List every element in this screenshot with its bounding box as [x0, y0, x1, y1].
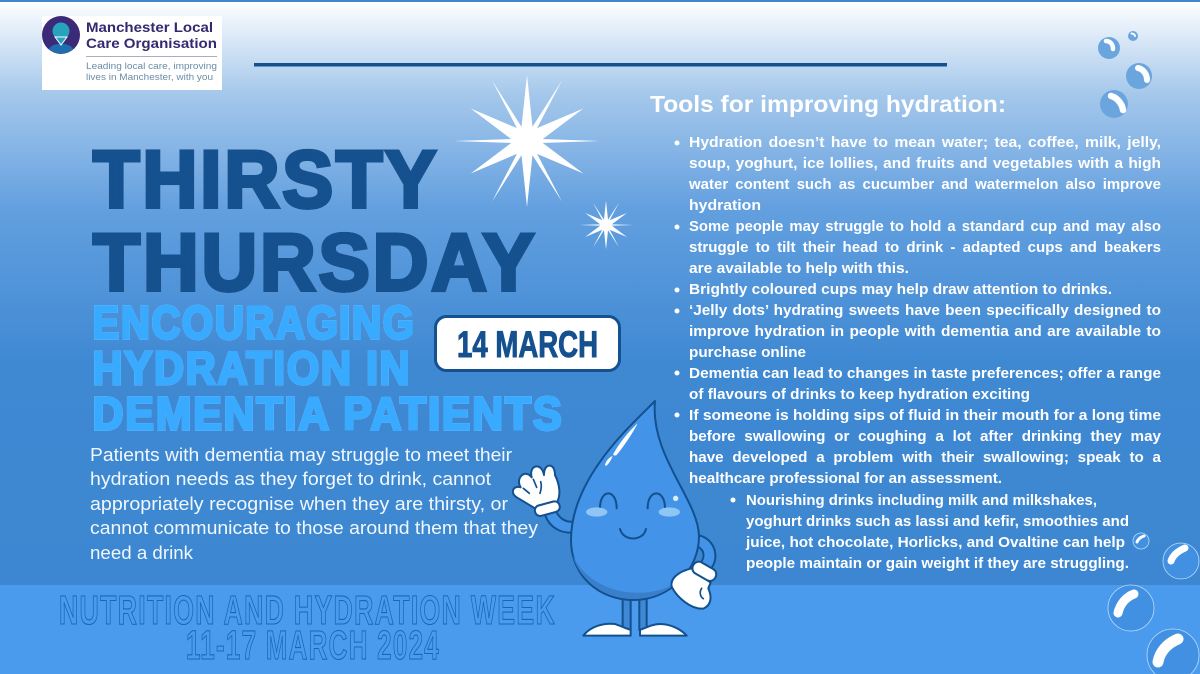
text block: hydration tools list: people maintain or gain weight if they are struggling.	[746, 555, 1129, 572]
text block: hydration tools list: hydration	[689, 197, 761, 214]
text block: intro paragraph: need a drink	[90, 543, 194, 563]
text block: hydration tools list: ‘Jelly dots’ hydrating sweets have been specifically designed to	[689, 302, 1161, 319]
text block: intro paragraph: cannot communicate to those around them that they	[90, 518, 538, 538]
text block: hydration tools list: Nourishing drinks including milk and milkshakes,	[746, 492, 1097, 509]
heading: Tools for improving hydration: Tools for improving hydration:	[650, 91, 1006, 117]
subtitle: Encouraging hydration in dementia patients: HYDRATION IN	[92, 342, 412, 394]
text block: hydration tools list: yoghurt drinks such as lassi and kefir, smoothies and	[746, 513, 1129, 530]
icon: water drop mascot	[513, 401, 718, 636]
shine	[605, 423, 638, 466]
text block: hydration tools list: If someone is holding sips of fluid in their mouth for a long time	[689, 407, 1161, 424]
divider line	[254, 63, 947, 66]
icon: bubbles top right	[1098, 31, 1152, 118]
text block: hydration tools list: healthcare professional for an assessment.	[689, 470, 1002, 487]
subtitle: Encouraging hydration in dementia patients: DEMENTIA PATIENTS	[92, 388, 564, 440]
subtitle: Encouraging hydration in dementia patients	[92, 296, 564, 440]
text block: intro paragraph: appropriately recognise when they are thirsty, or	[90, 494, 508, 514]
text block: hydration tools list: soup, yoghurt, ice lollies, and fruits and vegetables with a high	[689, 155, 1161, 172]
bottom banner text: Nutrition and Hydration Week	[59, 587, 556, 668]
text block: hydration tools list: are available to help with this.	[689, 260, 909, 277]
bottom banner text: Nutrition and Hydration Week: 11-17 MARCH 2024	[186, 622, 440, 668]
text block: hydration tools list: struggle to tilt their head to drink - adapted cups and beakers	[689, 239, 1161, 256]
text block: hydration tools list: before swallowing or coughing a lot after drinking they may	[689, 428, 1162, 445]
icon: small sparkle	[579, 201, 633, 249]
drop body	[571, 401, 699, 600]
logo: Manchester Local Care Organisation	[42, 16, 222, 90]
text block: intro paragraph	[90, 445, 538, 563]
text block: hydration tools list: have developed a problem with their swallowing; speak to a	[689, 449, 1162, 466]
logo: Manchester Local Care Organisation: Care Organisation	[86, 36, 217, 51]
right arm	[695, 535, 715, 570]
body shade	[573, 555, 677, 599]
bottom band	[0, 585, 1200, 674]
logo: Manchester Local Care Organisation: lives in Manchester, with you	[86, 72, 213, 83]
title: Thirsty Thursday: THIRSTY	[93, 135, 439, 225]
text block: hydration tools list: water content such as cucumber and watermelon also improve	[688, 176, 1161, 193]
shoes	[583, 624, 687, 636]
logo: Manchester Local Care Organisation: Manchester Local	[86, 20, 213, 35]
text block: hydration tools list: Some people may struggle to hold a standard cup and may also	[689, 218, 1161, 235]
text block: hydration tools list: Dementia can lead to changes in taste preferences; offer a range	[689, 365, 1161, 382]
left arm	[545, 512, 574, 533]
date badge: 14 March: 14 MARCH	[457, 324, 598, 365]
fist	[671, 568, 711, 609]
bottom banner text: Nutrition and Hydration Week: NUTRITION AND HYDRATION WEEK	[59, 587, 556, 633]
legs	[623, 597, 647, 630]
text block: hydration tools list: juice, hot chocolate, Horlicks, and Ovaltine can help	[745, 534, 1125, 551]
logo: Manchester Local Care Organisation: Leading local care, improving	[86, 61, 217, 72]
date badge: 14 March	[436, 316, 620, 370]
text block: hydration tools list: improve hydration in people with dementia and are available to	[689, 323, 1161, 340]
subtitle: Encouraging hydration in dementia patients: ENCOURAGING	[92, 296, 416, 348]
text block: hydration tools list: purchase online	[689, 344, 806, 361]
text block: intro paragraph: Patients with dementia may struggle to meet their	[90, 445, 512, 465]
text block: hydration tools list: of flavours of drinks to keep hydration exciting	[689, 386, 1030, 403]
eyes and mouth	[600, 493, 665, 538]
icon: bubbles bottom right	[1108, 533, 1199, 674]
waving hand	[513, 466, 559, 508]
text block: hydration tools list: Brightly coloured cups may help draw attention to drinks.	[689, 281, 1112, 298]
text block: hydration tools list	[674, 134, 1162, 572]
text block: hydration tools list: Hydration doesn’t have to mean water; tea, coffee, milk, jelly,	[689, 134, 1161, 151]
text block: intro paragraph: hydration needs as they forget to drink, cannot	[90, 469, 491, 489]
title: Thirsty Thursday	[93, 135, 537, 308]
icon: large sparkle	[454, 75, 600, 207]
title: Thirsty Thursday: THURSDAY	[93, 218, 537, 308]
cheeks	[586, 507, 607, 517]
